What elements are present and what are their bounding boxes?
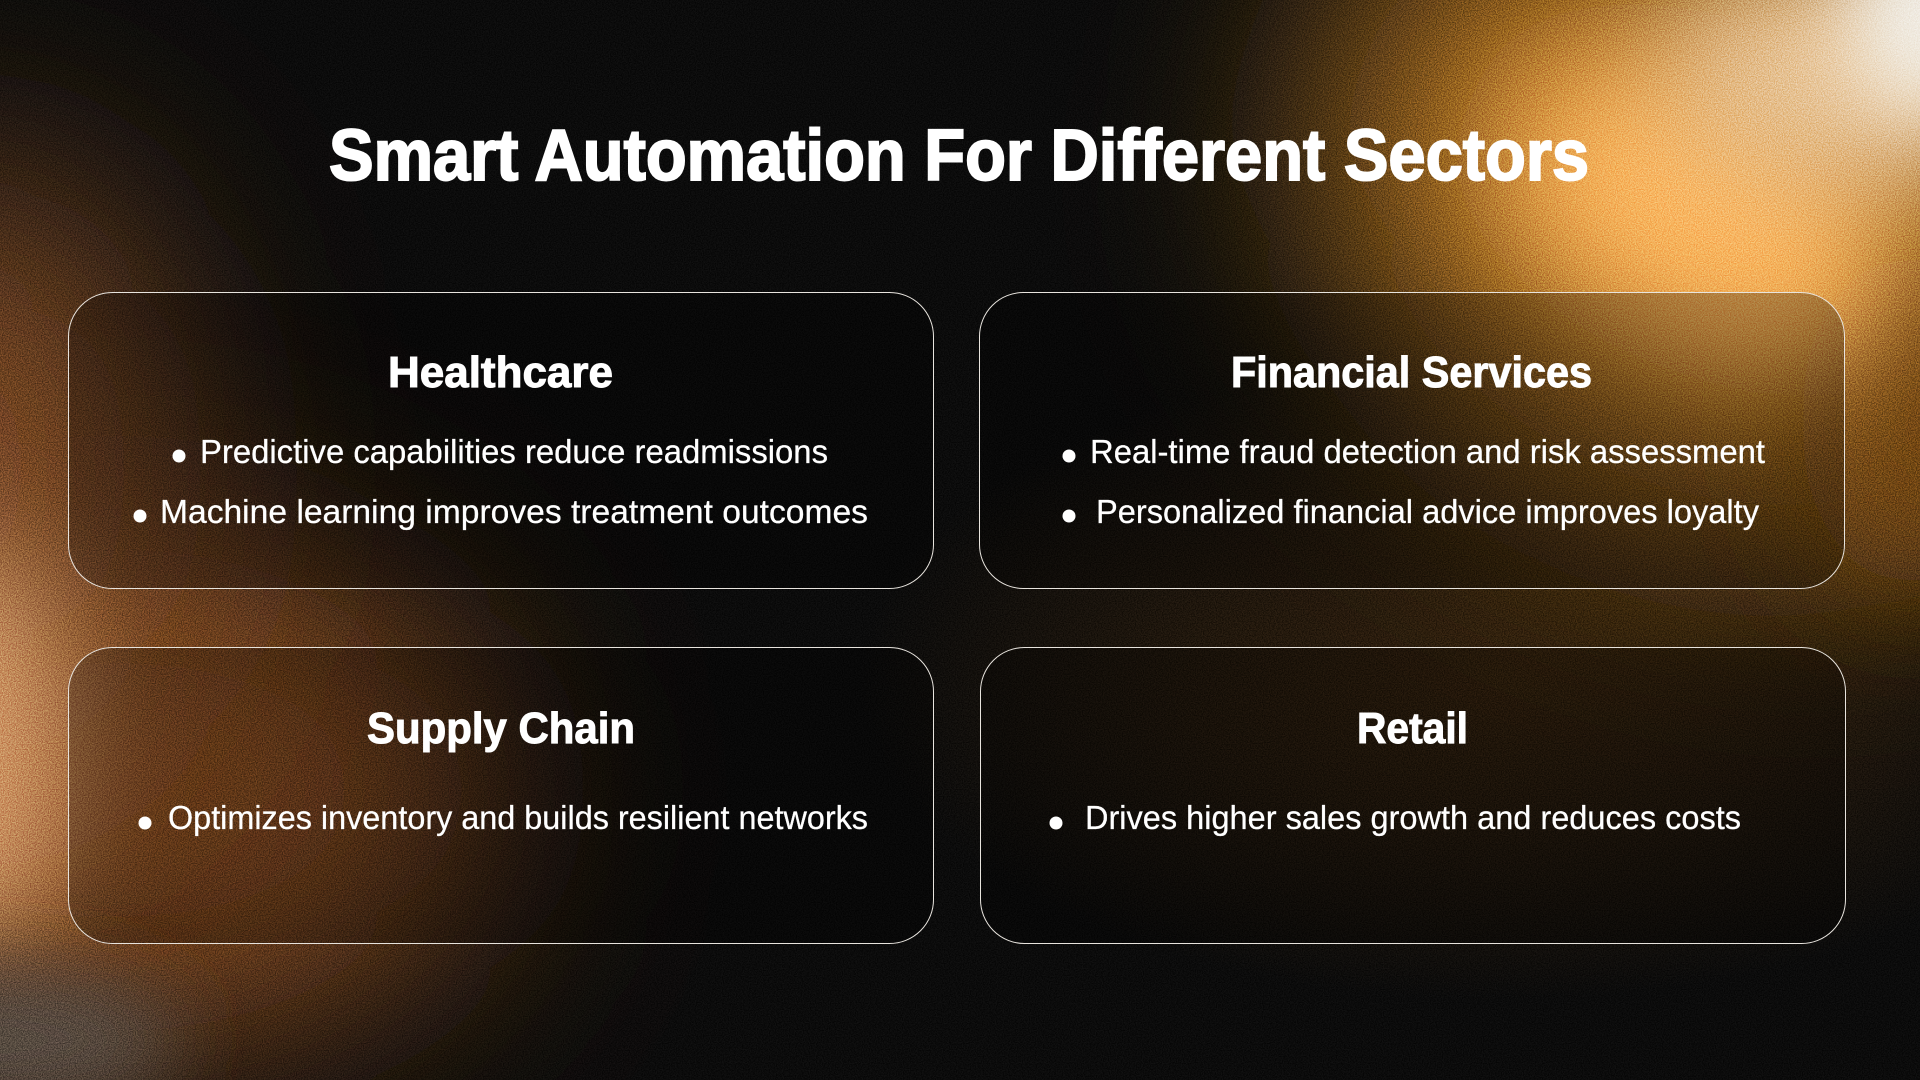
card outline [980, 648, 1846, 944]
panel: Retail [980, 648, 1846, 944]
bullet: machine learning: Machine learning improves treatment outcomes [160, 493, 868, 530]
bullet: sales growth: Drives higher sales growth and reduces costs [1085, 799, 1741, 836]
panel: Supply Chain [68, 648, 934, 944]
bullet: predictive capabilities: Predictive capabilities reduce readmissions [200, 433, 828, 470]
heading: Retail: Retail [1357, 704, 1468, 753]
panel: Financial Services [980, 292, 1844, 588]
heading: Financial Services: Financial Services [1231, 348, 1592, 397]
panel: Healthcare [68, 292, 934, 588]
bullet: financial advice: Personalized financial advice improves loyalty [1096, 493, 1759, 530]
card outline [980, 292, 1844, 588]
title: Smart Automation For Different Sectors [329, 116, 1589, 196]
heading: Supply Chain: Supply Chain [367, 704, 635, 753]
bullet: inventory: Optimizes inventory and builds resilient networks [168, 799, 868, 836]
card outline [68, 292, 934, 588]
heading: Healthcare: Healthcare [388, 348, 613, 397]
bullet: fraud detection: Real-time fraud detection and risk assessment [1090, 433, 1765, 470]
card outline [68, 648, 934, 944]
